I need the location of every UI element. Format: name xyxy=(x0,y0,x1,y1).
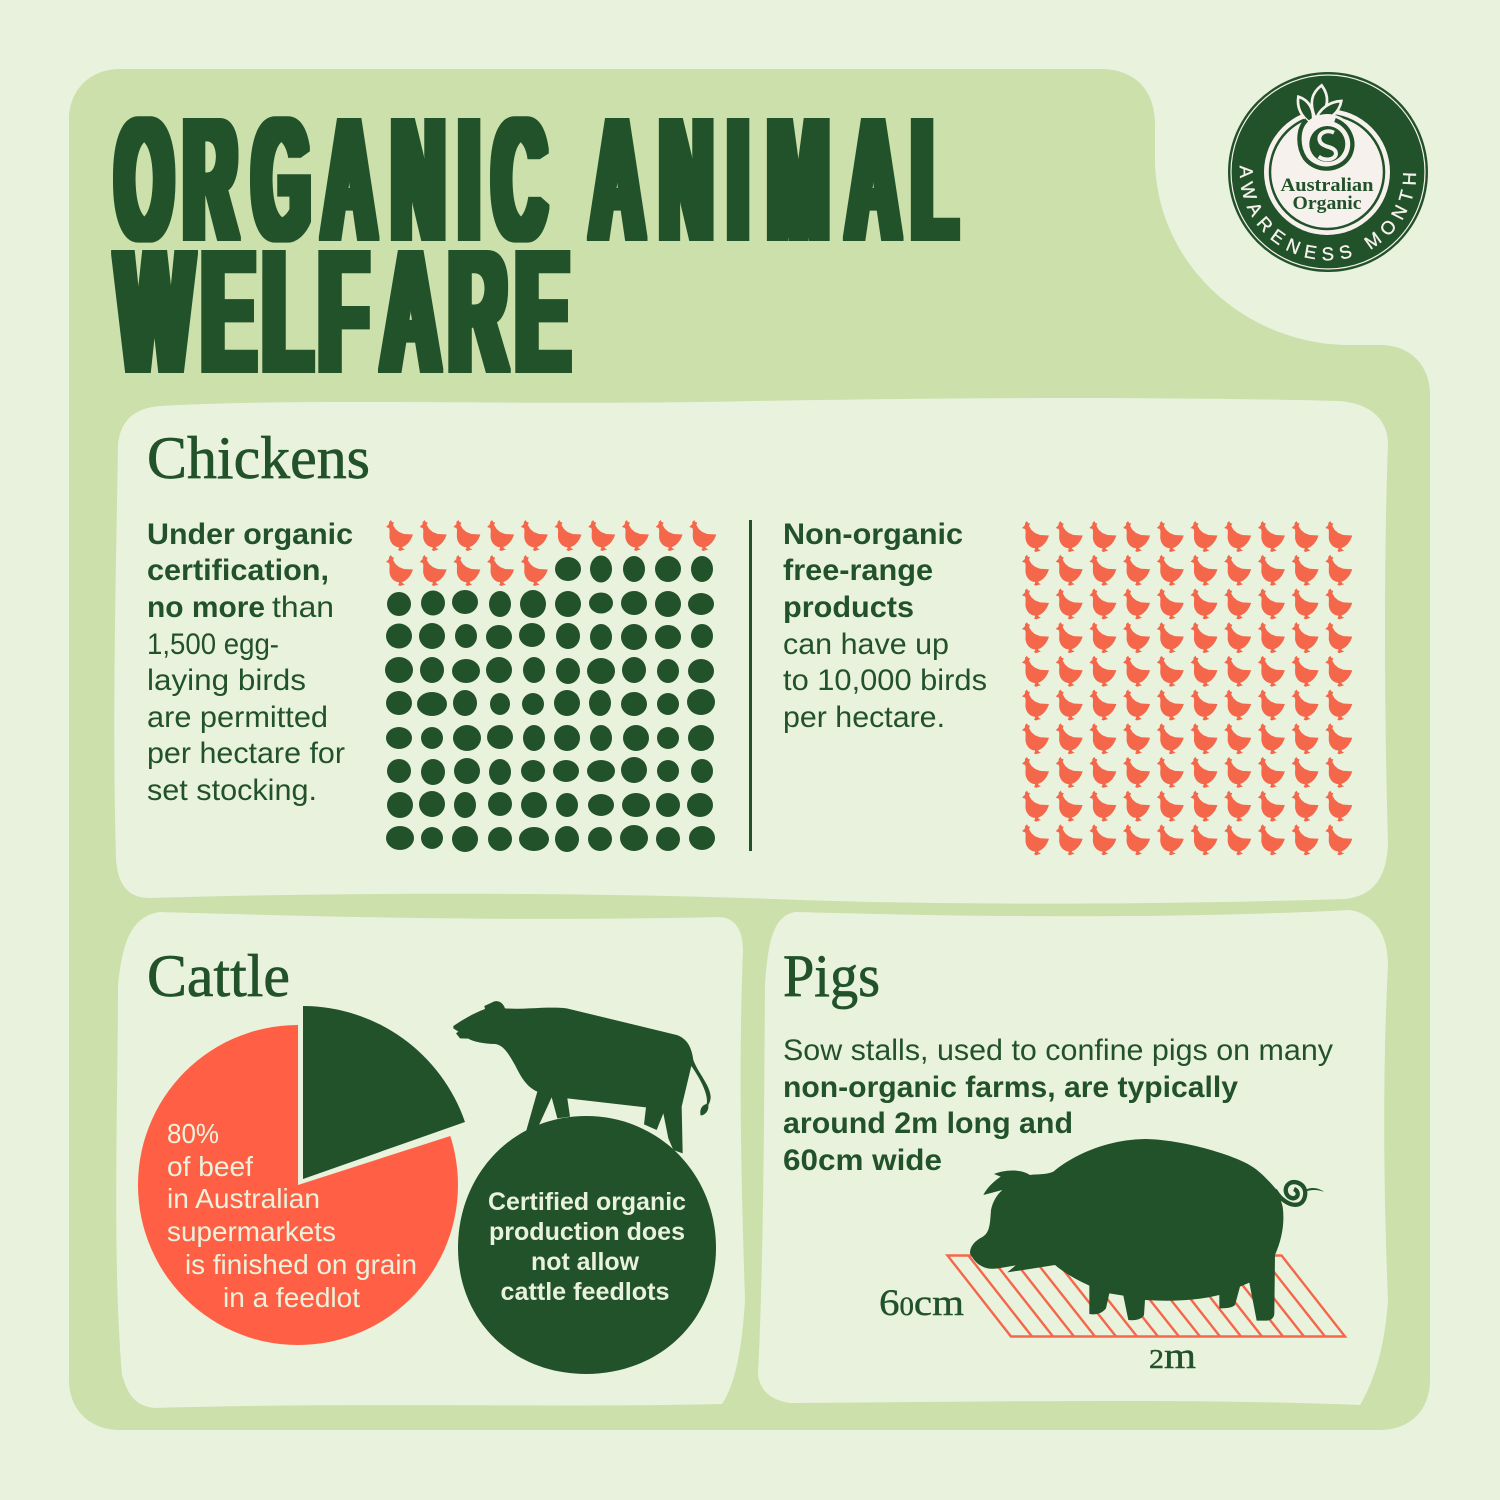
text: non-organic free range: Non-organic xyxy=(783,518,963,551)
text: organic stocking: laying birds xyxy=(147,664,306,697)
logo leaves xyxy=(1298,85,1341,123)
text: organic stocking: certification, xyxy=(147,554,329,587)
text: non-organic free range: to 10,000 birds xyxy=(783,664,987,697)
callout: no feedlots: production does xyxy=(489,1218,685,1246)
pie label: in a feedlot xyxy=(223,1282,360,1313)
text: non-organic free range: per hectare. xyxy=(783,701,945,734)
text: non-organic free range: products xyxy=(783,591,914,624)
text: organic stocking: per hectare for xyxy=(147,737,345,770)
label: 2m: 2m xyxy=(1149,1336,1196,1377)
icon: pig xyxy=(970,1139,1324,1321)
text: sow stalls: 60cm wide xyxy=(783,1144,942,1177)
title: ORGANIC ANIMAL xyxy=(116,84,956,277)
panel: pigs xyxy=(758,910,1388,1405)
text: sow stalls: non-organic farms, are typically xyxy=(783,1071,1238,1104)
text: organic stocking: than xyxy=(272,591,334,624)
text: organic stocking: are permitted xyxy=(147,701,328,734)
chart: non-organic birds per hectare xyxy=(1022,521,1352,855)
pie label: of beef xyxy=(167,1151,253,1182)
logo ring text: AWARENESS MONTH xyxy=(1240,166,1416,261)
chart: organic birds per hectare xyxy=(385,520,716,852)
diagram: sow stall floor xyxy=(948,1256,1345,1336)
panel: chickens xyxy=(114,398,1388,904)
text: non-organic free range: free-range xyxy=(783,554,933,587)
heading: cattle: Cattle xyxy=(147,943,290,1009)
callout: no feedlots xyxy=(458,1116,716,1374)
logo swirl xyxy=(1297,114,1357,174)
text: organic stocking: no more xyxy=(147,591,265,624)
pie label: is finished on grain xyxy=(185,1249,417,1280)
text: non-organic free range xyxy=(783,518,987,734)
pie label: 80% xyxy=(167,1118,219,1149)
text: sow stalls xyxy=(783,1034,1333,1177)
text: organic stocking: set stocking. xyxy=(147,774,317,807)
text: organic stocking: 1,500 egg- xyxy=(147,628,279,661)
pie label: supermarkets xyxy=(167,1216,336,1247)
text: organic stocking xyxy=(147,518,353,807)
text: sow stalls: around 2m long and xyxy=(783,1107,1073,1140)
pie label xyxy=(167,1118,417,1313)
icon: cow xyxy=(453,1001,711,1153)
heading: pigs: Pigs xyxy=(783,943,880,1009)
title xyxy=(116,84,956,408)
text: organic stocking: Under organic xyxy=(147,518,353,551)
panel: cattle xyxy=(116,912,745,1408)
text: non-organic free range: can have up xyxy=(783,628,949,661)
callout: no feedlots: Certified organic xyxy=(488,1188,686,1216)
heading: chickens: Chickens xyxy=(147,425,370,491)
title: WELFARE xyxy=(117,214,569,408)
callout: no feedlots: cattle feedlots xyxy=(500,1278,670,1306)
text: sow stalls: Sow stalls, used to confine pigs on many xyxy=(783,1034,1333,1067)
label: 60cm: 60cm xyxy=(879,1283,964,1324)
pie label: in Australian xyxy=(167,1183,320,1214)
logo wordmark: Australian xyxy=(1280,175,1374,196)
logo: Australian Organic Awareness Month badge: Organic xyxy=(1292,193,1362,214)
logo: Australian Organic Awareness Month badge xyxy=(1228,72,1428,272)
callout: no feedlots: not allow xyxy=(531,1248,640,1276)
chart: pie 80 percent xyxy=(138,1006,465,1345)
